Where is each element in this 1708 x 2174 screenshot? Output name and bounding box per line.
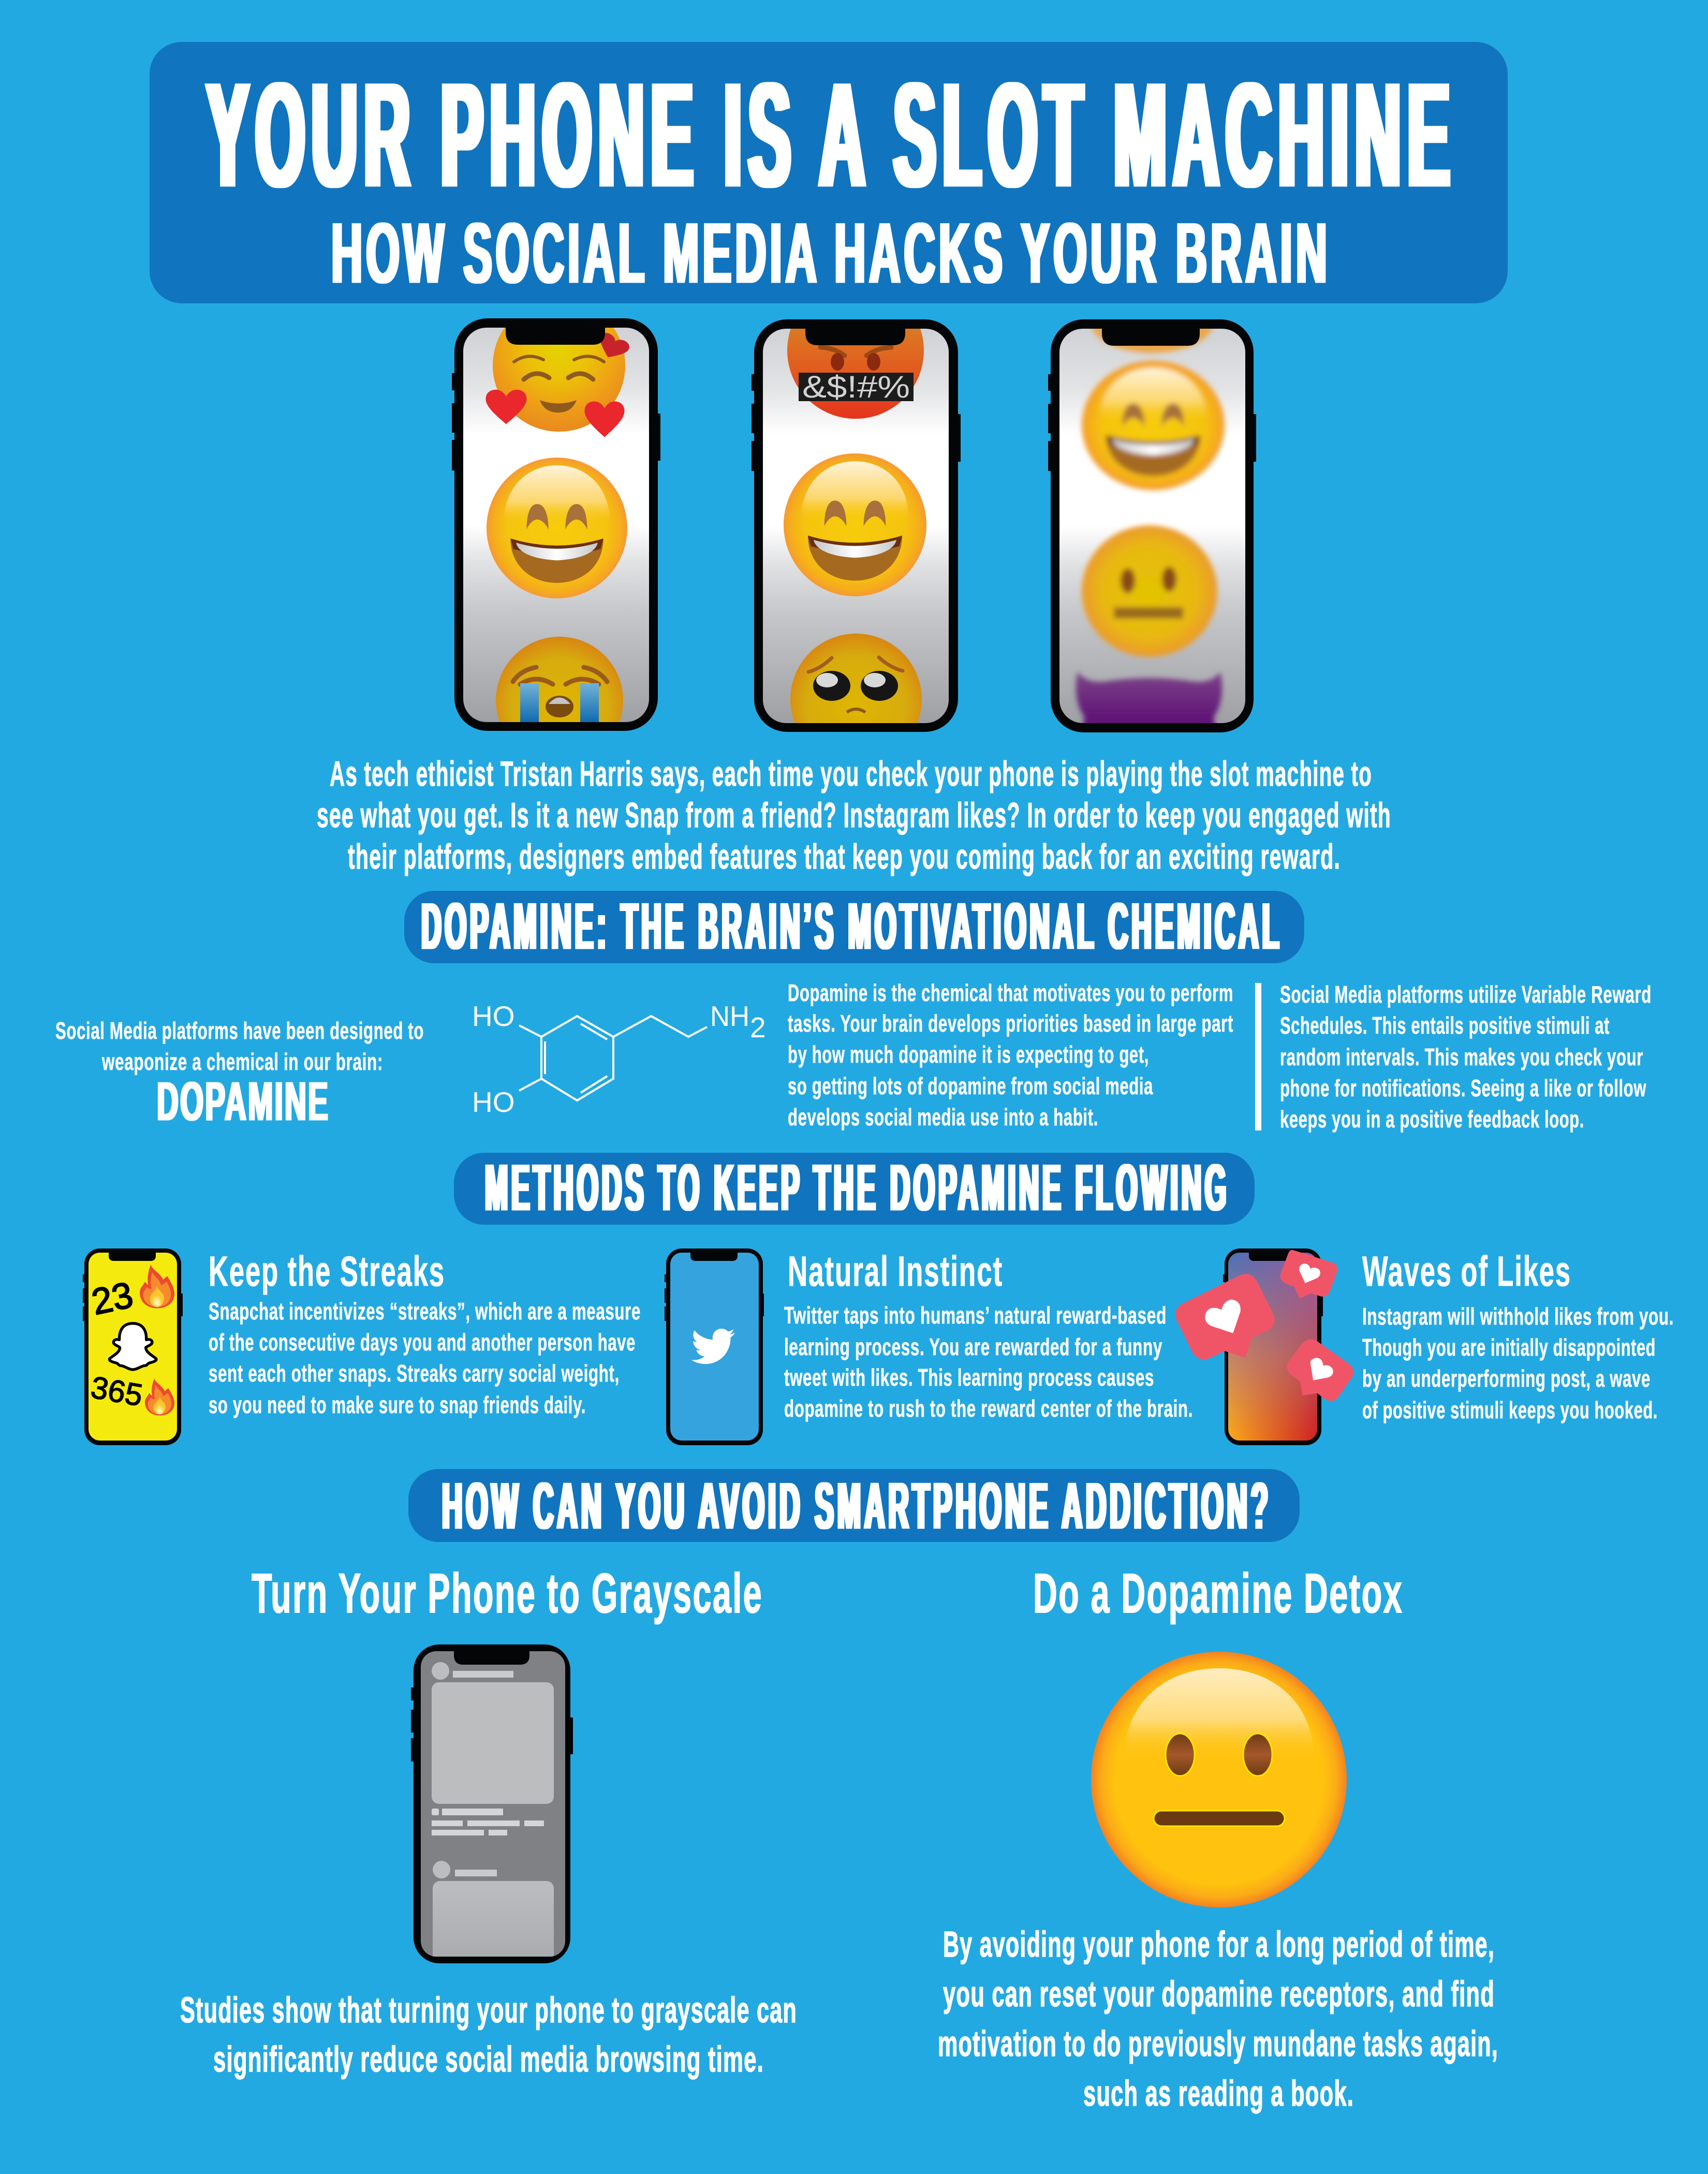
text: weaponize dopamine: Social Media platforms have been designed to — [55, 1017, 424, 1044]
phone: middle slot reel — [752, 319, 961, 732]
icon: snapchat ghost — [109, 1324, 156, 1370]
text: dopamine detox: such as reading a book. — [1083, 2073, 1354, 2113]
heading: dopamine detox: Do a Dopamine Detox — [1033, 1562, 1403, 1624]
icon: large like bubble — [1175, 1274, 1275, 1359]
emoji: smiling face with hearts — [485, 328, 629, 437]
divider — [1255, 983, 1261, 1130]
dopamine molecule diagram — [472, 1000, 766, 1118]
dopamine molecule diagram: HO — [472, 1000, 514, 1032]
text: grayscale study: significantly reduce social media browsing time. — [213, 2039, 764, 2079]
heading: dopamine — [404, 889, 1304, 963]
text: keep the streaks: Keep the Streaks — [209, 1248, 445, 1295]
emoji: blurred sliver — [1088, 329, 1216, 357]
text: weaponize dopamine: DOPAMINE — [157, 1071, 330, 1132]
notch — [1102, 325, 1200, 346]
dopamine molecule diagram: HO — [472, 1086, 514, 1118]
text: waves of likes — [1362, 1248, 1674, 1423]
text: keep the streaks: Snapchat incentivizes “streaks”, which are a measure — [209, 1298, 641, 1325]
text: weaponize dopamine — [55, 1017, 424, 1132]
emoji: swearing face: &$!#% — [802, 370, 910, 404]
text: keep the streaks: so you need to make sure to snap friends daily. — [209, 1391, 586, 1418]
emoji: large neutral face — [1091, 1652, 1347, 1907]
intro paragraph — [317, 754, 1391, 876]
notch — [805, 325, 905, 345]
dopamine molecule diagram: 2 — [750, 1011, 766, 1044]
text: keep the streaks: of the consecutive days you and another person have — [209, 1329, 636, 1356]
phone: right slot reel, spinning — [1048, 291, 1256, 732]
dopamine molecule diagram: NH — [710, 1000, 749, 1032]
icon: twitter phone — [665, 1248, 764, 1445]
text: variable reward schedules — [1280, 981, 1652, 1133]
icon: top like bubble — [1280, 1250, 1337, 1298]
icon: snapchat phone — [83, 1248, 183, 1445]
phone: left slot reel — [452, 318, 660, 731]
heading: methods — [454, 1151, 1255, 1225]
text: grayscale study — [180, 1990, 797, 2079]
icon: snapchat phone: 365 — [88, 1370, 145, 1413]
text: what dopamine does: by how much dopamine it is expecting to get, — [788, 1041, 1149, 1068]
text: what dopamine does: develops social media use into a habit. — [788, 1104, 1098, 1130]
text: natural instinct: Twitter taps into humans’ natural reward-based — [784, 1302, 1167, 1329]
emoji: blurred neutral face — [1082, 525, 1217, 657]
emoji: pleading face — [790, 634, 922, 723]
text: grayscale study: Studies show that turning your phone to grayscale can — [180, 1990, 797, 2030]
title banner — [150, 42, 1508, 303]
icon: twitter bird — [691, 1329, 735, 1364]
icon: snapchat phone: 23 — [88, 1274, 137, 1323]
text: weaponize dopamine: weaponize a chemical in our brain: — [101, 1048, 383, 1075]
emoji: grinning face — [487, 458, 627, 598]
emoji: blurred grin — [1082, 361, 1225, 490]
text: natural instinct: learning process. You are rewarded for a funny — [784, 1333, 1162, 1360]
text: what dopamine does — [788, 979, 1233, 1130]
icon: instagram phone with like bubbles — [1175, 1248, 1353, 1445]
text: dopamine detox — [938, 1924, 1498, 2113]
emoji: grinning face — [784, 453, 926, 596]
text: what dopamine does: Dopamine is the chemical that motivates you to perform — [788, 979, 1233, 1006]
text: waves of likes: Waves of Likes — [1362, 1248, 1571, 1295]
text: what dopamine does: tasks. Your brain develops priorities based in large part — [788, 1010, 1233, 1037]
heading: grayscale: Turn Your Phone to Grayscale — [252, 1562, 763, 1624]
icon: lower like bubble — [1287, 1340, 1353, 1401]
text: natural instinct — [784, 1248, 1193, 1422]
heading: avoid addiction — [408, 1469, 1300, 1543]
text: natural instinct: tweet with likes. This learning process causes — [784, 1364, 1154, 1391]
emoji: swearing face — [787, 329, 924, 419]
notch — [506, 324, 605, 345]
text: natural instinct: Natural Instinct — [788, 1248, 1003, 1295]
phone: grayscale feed — [411, 1644, 573, 1969]
text: keep the streaks: sent each other snaps. Streaks carry social weight, — [209, 1360, 620, 1387]
text: natural instinct: dopamine to rush to the reward center of the brain. — [784, 1395, 1193, 1422]
emoji: crying face — [496, 637, 623, 722]
emoji: blurred purple devil — [1076, 672, 1222, 730]
text: keep the streaks — [209, 1248, 641, 1418]
text: what dopamine does: so getting lots of dopamine from social media — [788, 1073, 1153, 1099]
